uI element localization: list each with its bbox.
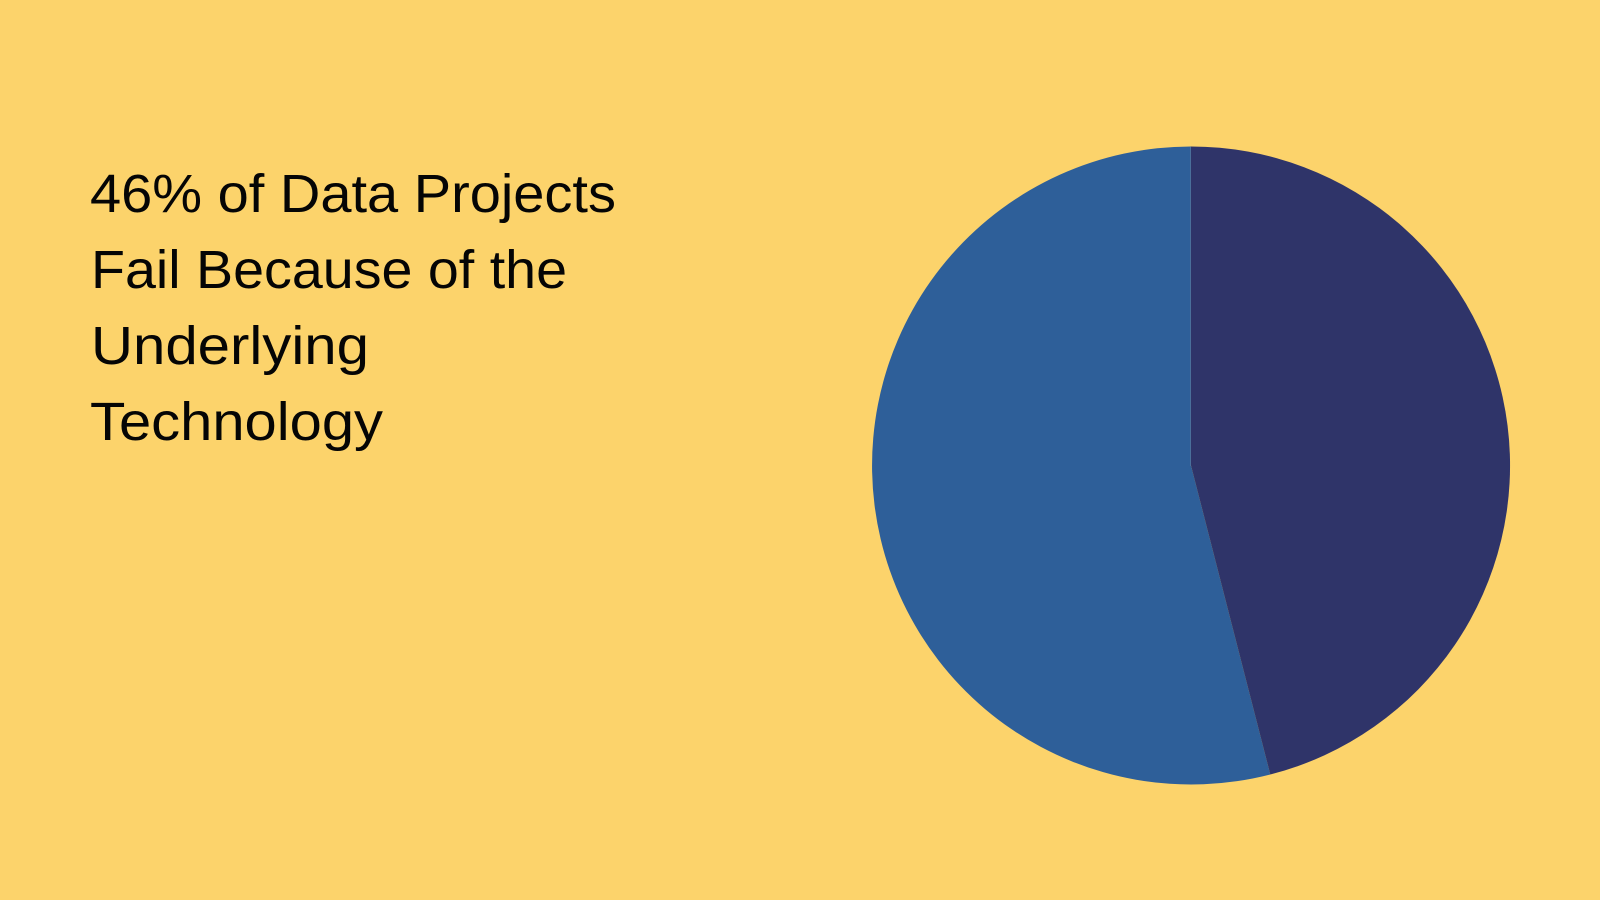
pie chart: 46% of data projects <box>872 146 1510 784</box>
title: headline text <box>90 164 616 452</box>
title: headline text: Fail Because of the <box>91 240 567 300</box>
title: headline text: Underlying <box>91 316 369 376</box>
pie slice: 46% <box>1191 146 1510 774</box>
pie slice: remaining 54% <box>872 146 1270 784</box>
title: headline text: Technology <box>90 392 383 452</box>
title: headline text: 46% of Data Projects <box>90 164 616 224</box>
